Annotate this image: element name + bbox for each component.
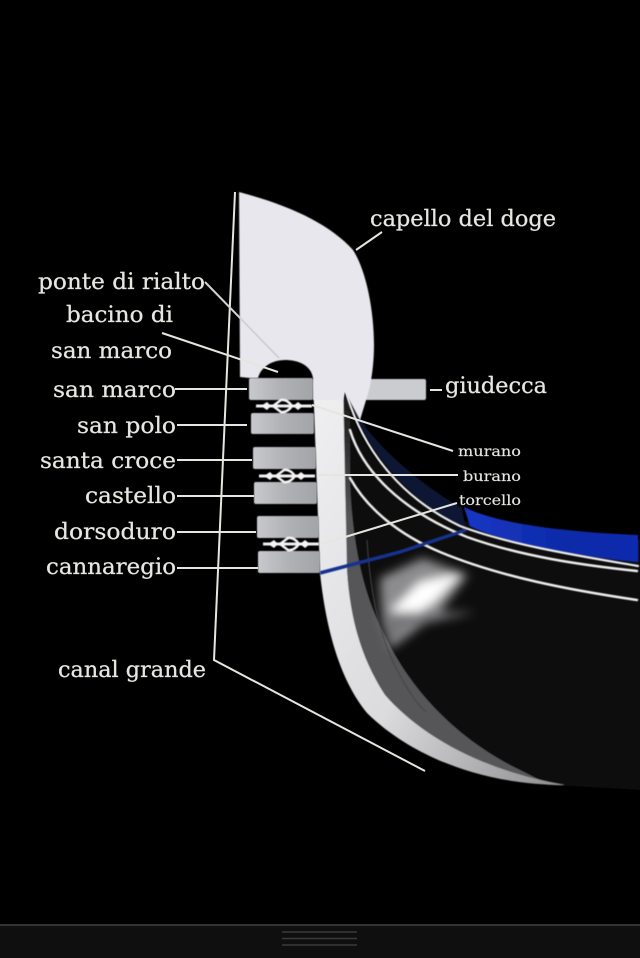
hull highlight xyxy=(380,558,475,650)
label: ponte di rialto: ponte di rialto xyxy=(38,269,205,295)
icon: menu handle xyxy=(282,932,357,945)
label: murano: murano xyxy=(458,444,521,460)
tooth 6 xyxy=(258,551,320,573)
canal grande line xyxy=(214,192,425,771)
label: san marco: san marco xyxy=(53,377,176,403)
labels xyxy=(38,206,556,683)
label: torcello: torcello xyxy=(459,493,521,509)
label: bacino di: bacino di xyxy=(66,302,173,328)
navy hull edge xyxy=(347,392,466,530)
giudecca bar xyxy=(360,379,426,400)
tooth 2 xyxy=(251,413,314,434)
label: castello: castello xyxy=(85,483,176,509)
blue line xyxy=(320,530,466,573)
label: santa croce: santa croce xyxy=(40,448,176,474)
giudecca dash xyxy=(430,389,442,391)
murano line xyxy=(312,405,453,451)
ponte di rialto line xyxy=(205,282,279,358)
torcello line xyxy=(322,503,457,544)
bright streak xyxy=(390,573,462,626)
tooth 5 xyxy=(257,516,319,538)
label: dorsoduro: dorsoduro xyxy=(54,519,176,545)
white stem xyxy=(313,380,565,785)
label: san marco (bacino): san marco xyxy=(51,338,172,364)
tooth 4 xyxy=(254,482,317,504)
label: capello del doge: capello del doge xyxy=(370,206,556,232)
comb teeth xyxy=(249,378,320,573)
capello line xyxy=(356,232,382,250)
bottom bar xyxy=(0,924,640,958)
hull seam xyxy=(367,540,426,712)
label: burano: burano xyxy=(463,469,521,485)
grey band xyxy=(343,388,550,785)
label: san polo: san polo xyxy=(77,413,176,439)
soft grey sheen xyxy=(380,558,468,648)
tooth 3 xyxy=(253,447,316,469)
tooth 1 xyxy=(249,378,313,400)
hull lines xyxy=(320,388,638,712)
ornament: murano xyxy=(256,400,312,412)
white hull lines xyxy=(345,388,638,600)
ornament: burano xyxy=(259,470,315,482)
lower glint xyxy=(383,612,475,650)
blue stripe xyxy=(464,507,638,562)
label: cannaregio: cannaregio xyxy=(46,554,176,580)
burano line xyxy=(317,474,458,476)
label: giudecca: giudecca xyxy=(445,373,547,399)
label: canal grande: canal grande xyxy=(58,657,206,683)
hull body xyxy=(343,388,640,790)
sestieri dashes xyxy=(175,389,258,568)
ornament: torcello xyxy=(263,538,319,550)
blade shape xyxy=(239,192,374,420)
leader lines xyxy=(162,192,458,771)
blade: capello del doge xyxy=(239,192,426,420)
bacino line xyxy=(162,333,278,372)
gondola hull xyxy=(313,380,640,790)
